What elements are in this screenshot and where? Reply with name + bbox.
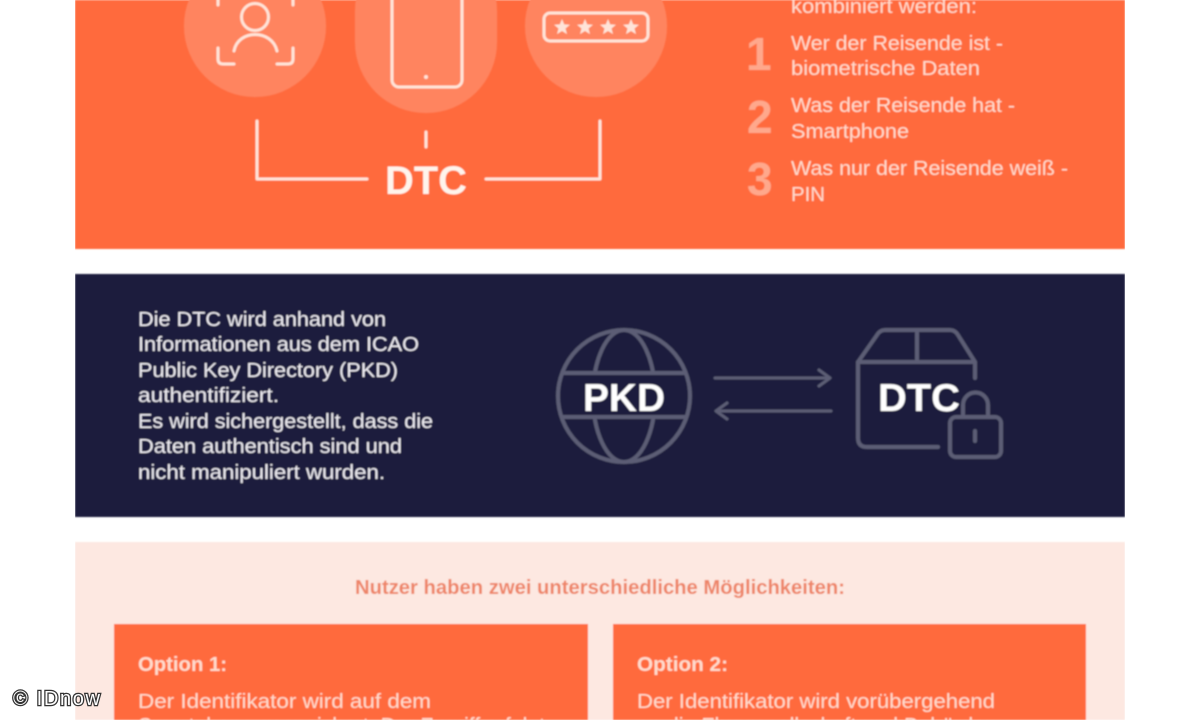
option 1 card bbox=[114, 624, 588, 720]
panel: PKD authentication bbox=[75, 274, 1125, 517]
factor 3 bbox=[747, 153, 1068, 206]
panel: user options bbox=[75, 542, 1125, 720]
icon: PIN code bbox=[525, 0, 667, 97]
description text: authentifiziert. bbox=[138, 385, 279, 407]
options heading: Nutzer haben zwei unterschiedliche Möglichkeiten: bbox=[355, 577, 845, 599]
description text: nicht manipuliert wurden. bbox=[138, 462, 385, 484]
factor 2: Was der Reisende hat - bbox=[791, 95, 1015, 117]
option 2 card: Der Identifikator wird vorübergehend bbox=[637, 691, 995, 713]
factor 2: 2 bbox=[747, 91, 773, 143]
description text: Es wird sichergestellt, dass die bbox=[138, 411, 433, 433]
factor 2: Smartphone bbox=[791, 121, 909, 143]
DTC bracket bbox=[257, 121, 600, 203]
factor 3: 3 bbox=[747, 153, 773, 205]
icon: smartphone bbox=[355, 0, 497, 113]
factor 3: Was nur der Reisende weiß - bbox=[791, 158, 1068, 180]
factor 1 bbox=[746, 28, 1003, 80]
description text: Public Key Directory (PKD) bbox=[138, 360, 398, 382]
icon: globe PKD bbox=[558, 330, 690, 462]
option 2 card: Option 2: bbox=[637, 654, 728, 676]
description text bbox=[138, 309, 433, 484]
description text: Informationen aus dem ICAO bbox=[138, 334, 419, 356]
description text: Daten authentisch sind und bbox=[138, 436, 402, 458]
icon: locked DTC box bbox=[858, 330, 1001, 457]
factor 1: 1 bbox=[746, 28, 772, 80]
factor 2 bbox=[747, 91, 1015, 143]
option 2 card bbox=[613, 624, 1086, 720]
factor 1: biometrische Daten bbox=[791, 58, 980, 80]
description text: Die DTC wird anhand von bbox=[138, 309, 386, 331]
factor list bbox=[746, 0, 1068, 206]
factor 3: PIN bbox=[791, 184, 825, 206]
icon: locked DTC box: DTC bbox=[878, 377, 960, 420]
DTC bracket: DTC bbox=[385, 159, 467, 203]
arrows: exchange bbox=[715, 370, 831, 419]
panel: authentication factors bbox=[75, 0, 1125, 249]
icon: biometric face scan bbox=[184, 0, 326, 97]
copyright watermark: © IDnow bbox=[13, 688, 101, 710]
icon: globe PKD: PKD bbox=[583, 377, 665, 420]
factor 1: Wer der Reisende ist - bbox=[791, 33, 1003, 55]
option 1 card: Der Identifikator wird auf dem bbox=[138, 691, 431, 713]
option 1 card: Option 1: bbox=[138, 654, 227, 676]
